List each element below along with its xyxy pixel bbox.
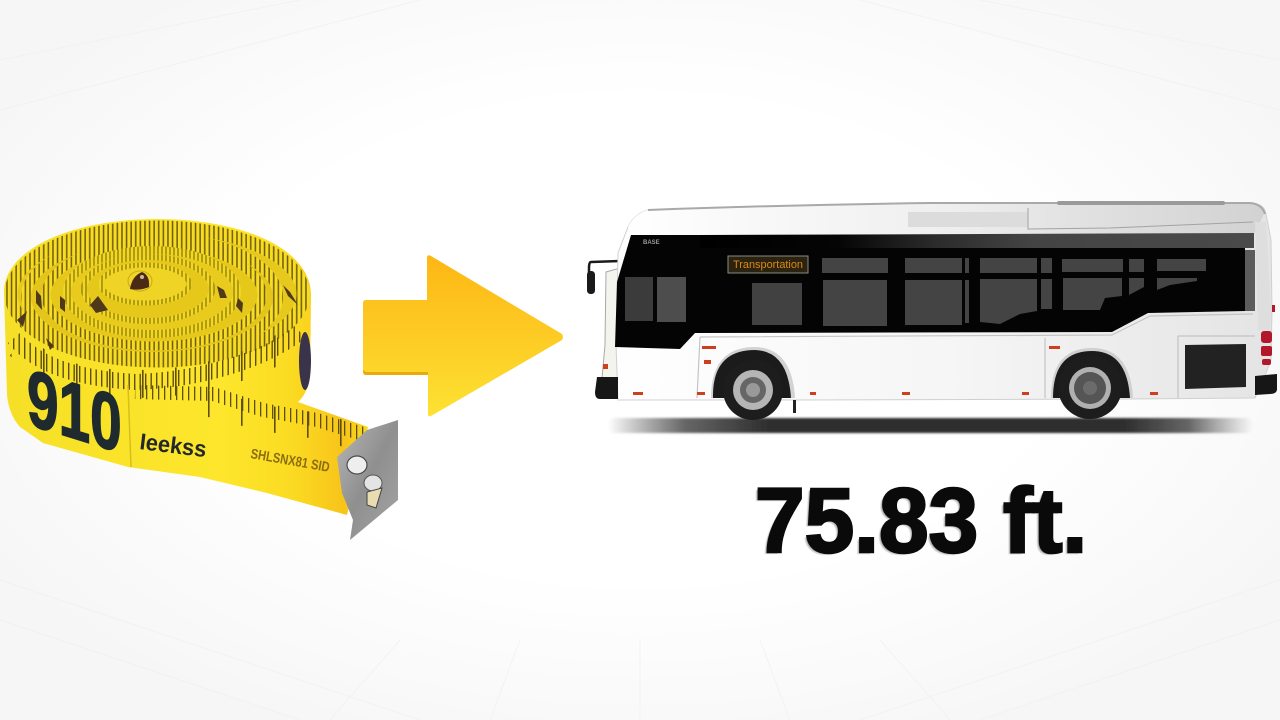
rear lights — [1261, 305, 1275, 365]
rear window — [1245, 250, 1255, 311]
mirror — [589, 261, 620, 273]
bus — [587, 201, 1277, 420]
rear wheel — [1051, 348, 1133, 419]
windows — [625, 258, 1206, 326]
destination sign: Transportation — [733, 259, 803, 271]
number 910: 910 — [27, 351, 122, 470]
centre rivet — [128, 271, 152, 291]
rear vent — [1185, 344, 1246, 389]
skirt panel lines — [697, 314, 1255, 398]
window band — [615, 235, 1245, 349]
coil rings — [26, 237, 278, 357]
roof units — [1057, 201, 1225, 205]
front rim ticks — [14, 332, 300, 384]
side emblem — [299, 332, 311, 390]
bus badge: BASE — [643, 240, 660, 246]
fold line — [128, 385, 131, 467]
upper dark strip — [700, 233, 1254, 248]
roof pod — [908, 212, 1028, 227]
front wheel — [711, 347, 795, 420]
bus body — [616, 203, 1272, 400]
destination sign — [728, 256, 808, 273]
coil centre — [101, 265, 189, 303]
roof — [628, 204, 1264, 235]
strip ticks — [135, 392, 363, 434]
marker lights — [603, 346, 1158, 395]
rear end panel — [1255, 222, 1271, 330]
roof panel line — [1028, 208, 1253, 229]
tape silhouette — [4, 219, 368, 515]
icon: yellow measuring tape — [4, 219, 398, 540]
metal end hook — [337, 420, 398, 540]
tape label: Ieekss — [138, 428, 208, 462]
roof edge line — [648, 203, 1265, 214]
arrow — [363, 255, 563, 416]
length value: 75.83 ft. — [755, 470, 1087, 572]
tape small print: SHLSNX81 SID — [249, 445, 331, 475]
front bumper — [595, 377, 618, 399]
rear bumper — [1255, 374, 1277, 395]
step post — [793, 400, 796, 413]
bus shadow — [608, 418, 1253, 433]
coil outer ring — [11, 227, 303, 361]
dark gaps between coils — [17, 285, 298, 350]
front pillar — [602, 268, 620, 378]
